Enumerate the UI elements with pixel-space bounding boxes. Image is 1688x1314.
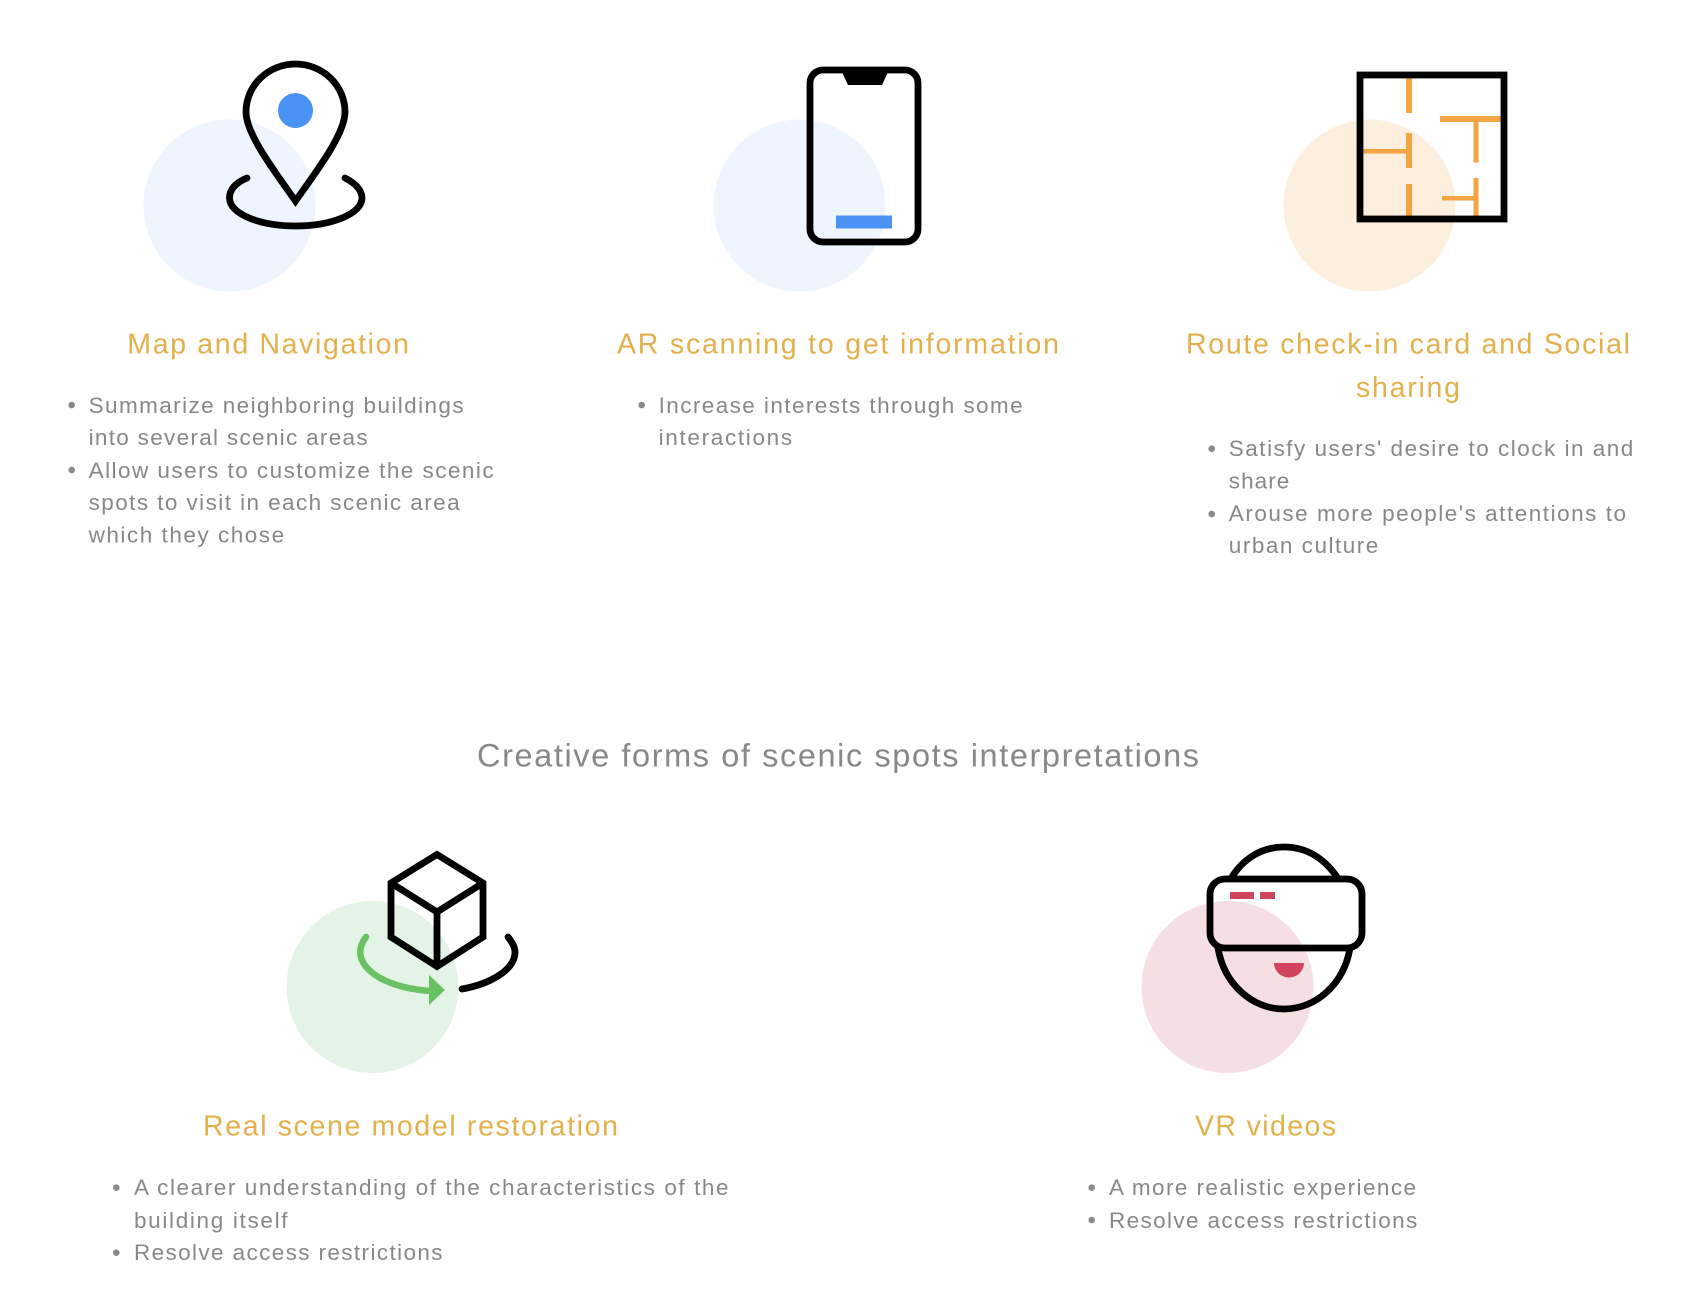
bullet list: AR scanning [638,393,1023,450]
heading: Route check-in card and Social sharing [1186,329,1630,404]
heading: Real scene model restoration: Real scene model restoration [203,1111,618,1143]
panel: AR scanning [617,70,1059,450]
bullet list: AR scanning: Increase interests through some [659,393,1023,418]
panel: VR videos [1088,847,1417,1233]
heading: Route check-in card and Social sharing: sharing [1356,372,1460,404]
bullet list: map and navigation: Summarize neighboring buildings [89,393,464,418]
bullet list: route check-in: urban culture [1229,533,1378,558]
bullet list: route check-in: Satisfy users' desire to clock in and [1229,436,1633,461]
bullet list: VR videos: A more realistic experience [1109,1175,1416,1200]
bullet list: route check-in: share [1229,468,1289,493]
bullet list: map and navigation: into several scenic areas [89,425,368,450]
panel: Route check-in card and Social sharing [1186,75,1633,558]
section title: Creative forms: Creative forms of scenic spots interpretations [477,738,1199,774]
icon: smartphone on light blue circle [714,70,918,292]
bullet list: real scene model: building itself [134,1208,288,1233]
heading: Map and Navigation: Map and Navigation [127,329,409,361]
icon: VR headset on light pink circle [1142,847,1362,1073]
bullet list: VR videos [1088,1175,1417,1233]
panel: Map and Navigation [68,64,494,548]
bullet list: real scene model: Resolve access restrictions [134,1240,442,1265]
heading: Route check-in card and Social sharing: Route check-in card and Social [1186,329,1630,361]
panel: Real scene model restoration [113,854,728,1265]
bullet list: map and navigation: Allow users to customize the scenic [89,458,494,483]
bullet list: VR videos: Resolve access restrictions [1109,1208,1417,1233]
bullet list: route check-in [1208,436,1633,558]
bullet list: map and navigation [68,393,494,548]
heading: AR scanning to get information: AR scanning to get information [617,329,1059,361]
icon: rotating cube on light green circle [286,854,515,1073]
bullet list: real scene model: A clearer understanding of the characteristics of the [134,1175,728,1200]
icon: floor plan on light orange circle [1284,75,1504,292]
heading: VR videos: VR videos [1195,1111,1336,1143]
bullet list: map and navigation: spots to visit in each scenic area [89,490,460,515]
bullet list: AR scanning: interactions [659,425,792,450]
bullet list: route check-in: Arouse more people's attentions to [1229,501,1626,526]
bullet list: map and navigation: which they chose [88,522,284,548]
icon: map pin on light blue circle [144,64,362,292]
bullet list: real scene model [113,1175,728,1265]
